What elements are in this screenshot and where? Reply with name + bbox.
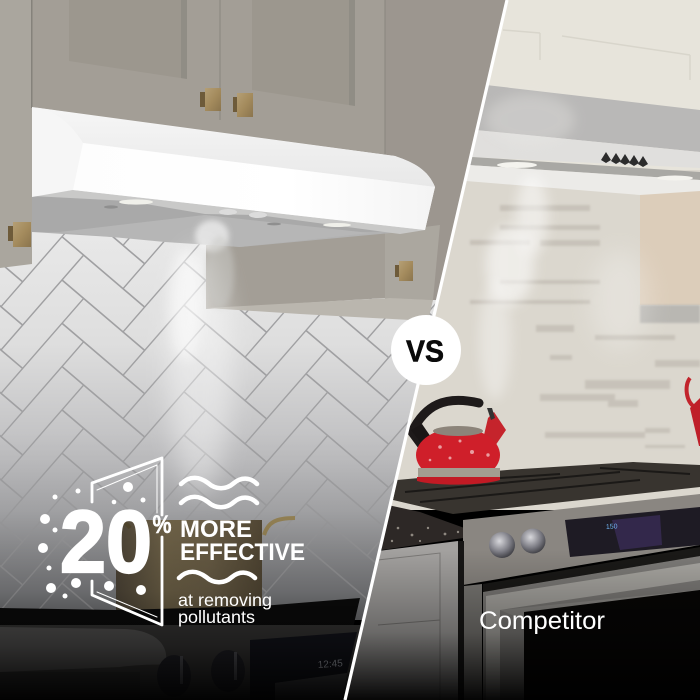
second kettle [687, 378, 700, 446]
bottom darkening overlay [340, 550, 700, 700]
left cabinet column [0, 0, 32, 268]
VS badge [391, 315, 461, 385]
heading: more effective [180, 516, 305, 566]
subtext: at removing pollutants: at removing [178, 590, 272, 610]
upper cabinet doors [138, 0, 440, 300]
competitor label: Competitor [479, 607, 605, 635]
subtext: at removing pollutants: pollutants [178, 607, 255, 627]
VS badge: VS [406, 334, 444, 368]
hood underside [32, 190, 425, 247]
heading: more effective: MORE [180, 516, 252, 543]
range control panel: 150 [606, 523, 618, 531]
cooktop and stove [0, 598, 360, 700]
stat: percent sign: % [152, 511, 172, 539]
competitor smoke [479, 94, 650, 400]
herringbone backsplash [0, 232, 436, 620]
hood body [32, 107, 435, 230]
stove clock readout: 12:45 [317, 658, 344, 671]
cabinet knobs [8, 88, 413, 281]
range knobs [489, 528, 546, 558]
icon: pollutant particles [38, 482, 146, 598]
callout: 20% more effective badge [38, 458, 305, 627]
cream upper cabinet [470, 0, 700, 170]
panel: competitor kitchen scene [340, 0, 700, 700]
steam plume [168, 220, 234, 495]
competitor hood [466, 85, 700, 195]
range body [458, 494, 700, 700]
icon: air waves [179, 478, 257, 582]
bottom darkening overlay [0, 510, 387, 700]
white diagonal divider [345, 0, 507, 700]
competitor backsplash [392, 170, 700, 510]
gas range grates [393, 462, 700, 514]
subtext: at removing pollutants [178, 590, 272, 627]
cabinet wall background [0, 0, 510, 330]
range control panel [565, 507, 700, 557]
stat: 20: 20 [60, 492, 152, 591]
lower cabinet box [206, 225, 440, 321]
panel: product side kitchen scene [0, 0, 511, 700]
icon: filter frame [92, 458, 162, 625]
pot [116, 516, 295, 610]
lower cabinet [345, 541, 458, 700]
heading: more effective: EFFECTIVE [180, 539, 305, 566]
granite countertop [382, 506, 463, 550]
red kettle [411, 400, 506, 485]
